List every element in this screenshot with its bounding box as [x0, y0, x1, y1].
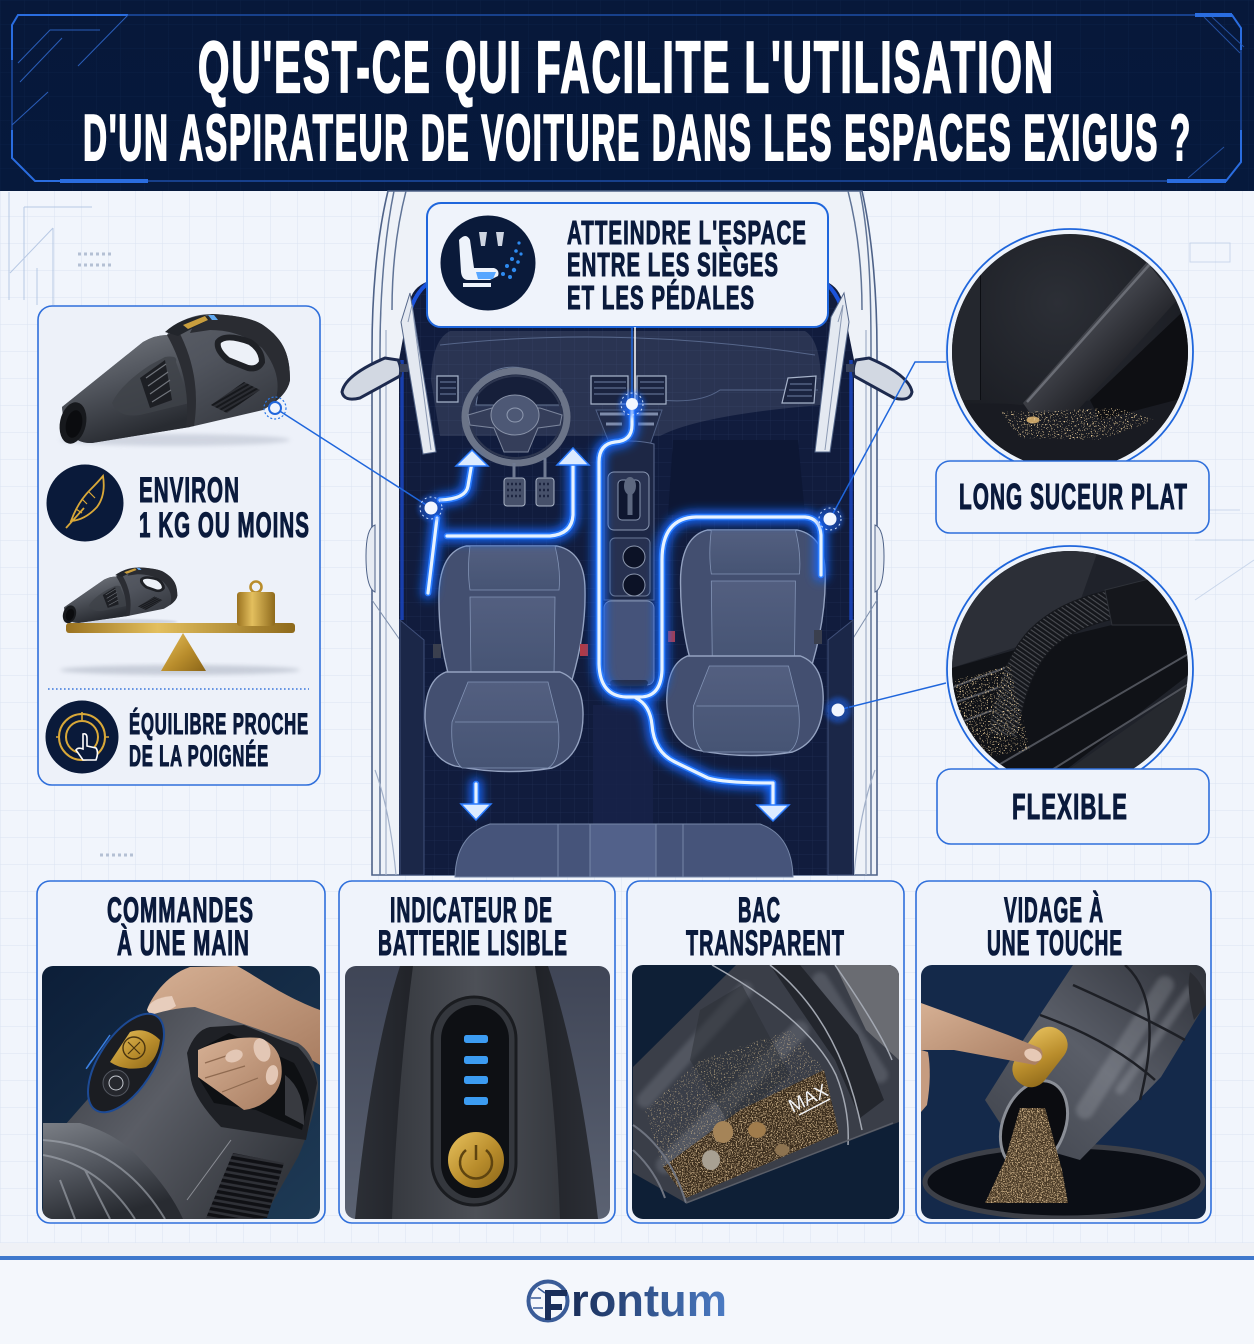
card title: [378, 891, 568, 963]
callout text: ET LES PÉDALES: [567, 279, 755, 316]
card title: INDICATEUR DE: [390, 891, 553, 930]
card title: COMMANDES: [107, 891, 254, 930]
balance text: [129, 707, 309, 773]
photo: battery display: [345, 966, 610, 1219]
balance scale: [60, 567, 300, 675]
card title: UNE TOUCHE: [987, 924, 1123, 963]
photo: flat nozzle on seat: [945, 225, 1195, 480]
steering wheel: [465, 371, 567, 463]
vacuum product photo: [56, 314, 290, 446]
label: flexible: [937, 769, 1209, 844]
photo: transparent dust bin: MAX: [785, 1080, 832, 1118]
card title: [107, 891, 254, 963]
weight text: ENVIRON: [139, 471, 240, 510]
leader lines: [275, 327, 946, 710]
weight text: 1 KG OU MOINS: [139, 506, 310, 545]
card title: TRANSPARENT: [686, 924, 845, 963]
weight text: [139, 471, 310, 545]
card: transparent bin: [627, 881, 904, 1223]
panel: long crevice nozzle: [936, 225, 1209, 533]
logo: Frontum: rontum: [571, 1275, 727, 1326]
glowing access routes: [428, 404, 821, 808]
label: long suceur plat: [936, 461, 1209, 533]
callout text: [567, 214, 807, 316]
panel: weight and balance: [38, 306, 320, 785]
car top view: [342, 191, 912, 877]
callout text: ATTEINDRE L'ESPACE: [567, 214, 807, 251]
footer: [0, 1243, 1254, 1344]
rear seat: [455, 824, 793, 877]
photo: flexible hose in seat rail: [946, 545, 1194, 768]
icon: seat and pedals: [440, 216, 536, 310]
card title: BAC: [738, 891, 781, 930]
label: flexible: FLEXIBLE: [1012, 786, 1128, 827]
card title: [987, 890, 1123, 963]
photo: transparent dust bin: [632, 965, 899, 1219]
car body: [366, 191, 884, 875]
panel: reach callout: [427, 203, 828, 327]
photo: hand on controls: [42, 966, 320, 1219]
card: one-hand controls: [37, 881, 325, 1223]
icon: balance point: [46, 700, 118, 774]
header tech frame: [12, 15, 1244, 181]
card: battery indicator: [339, 881, 615, 1223]
pillars and mirrors: [342, 293, 912, 454]
card title: [686, 891, 845, 963]
photo: emptying bin into trash: [921, 965, 1206, 1219]
card: one-touch emptying: [916, 881, 1211, 1223]
callout text: ENTRE LES SIÈGES: [567, 246, 779, 283]
balance text: DE LA POIGNÉE: [129, 739, 269, 773]
header banner: [0, 0, 1254, 191]
card title: VIDAGE À: [1004, 890, 1104, 930]
icon: feather: [46, 464, 124, 542]
card title: BATTERIE LISIBLE: [378, 924, 568, 963]
route arrowheads: [456, 448, 789, 821]
front seats: [425, 530, 825, 772]
pedals: [504, 458, 554, 506]
leader hotspots: [264, 391, 851, 723]
dashboard: [431, 331, 821, 445]
card title: À UNE MAIN: [117, 923, 250, 963]
panel: flexible hose: [937, 545, 1209, 844]
balance text: ÉQUILIBRE PROCHE: [129, 707, 309, 741]
center console: [604, 441, 654, 686]
